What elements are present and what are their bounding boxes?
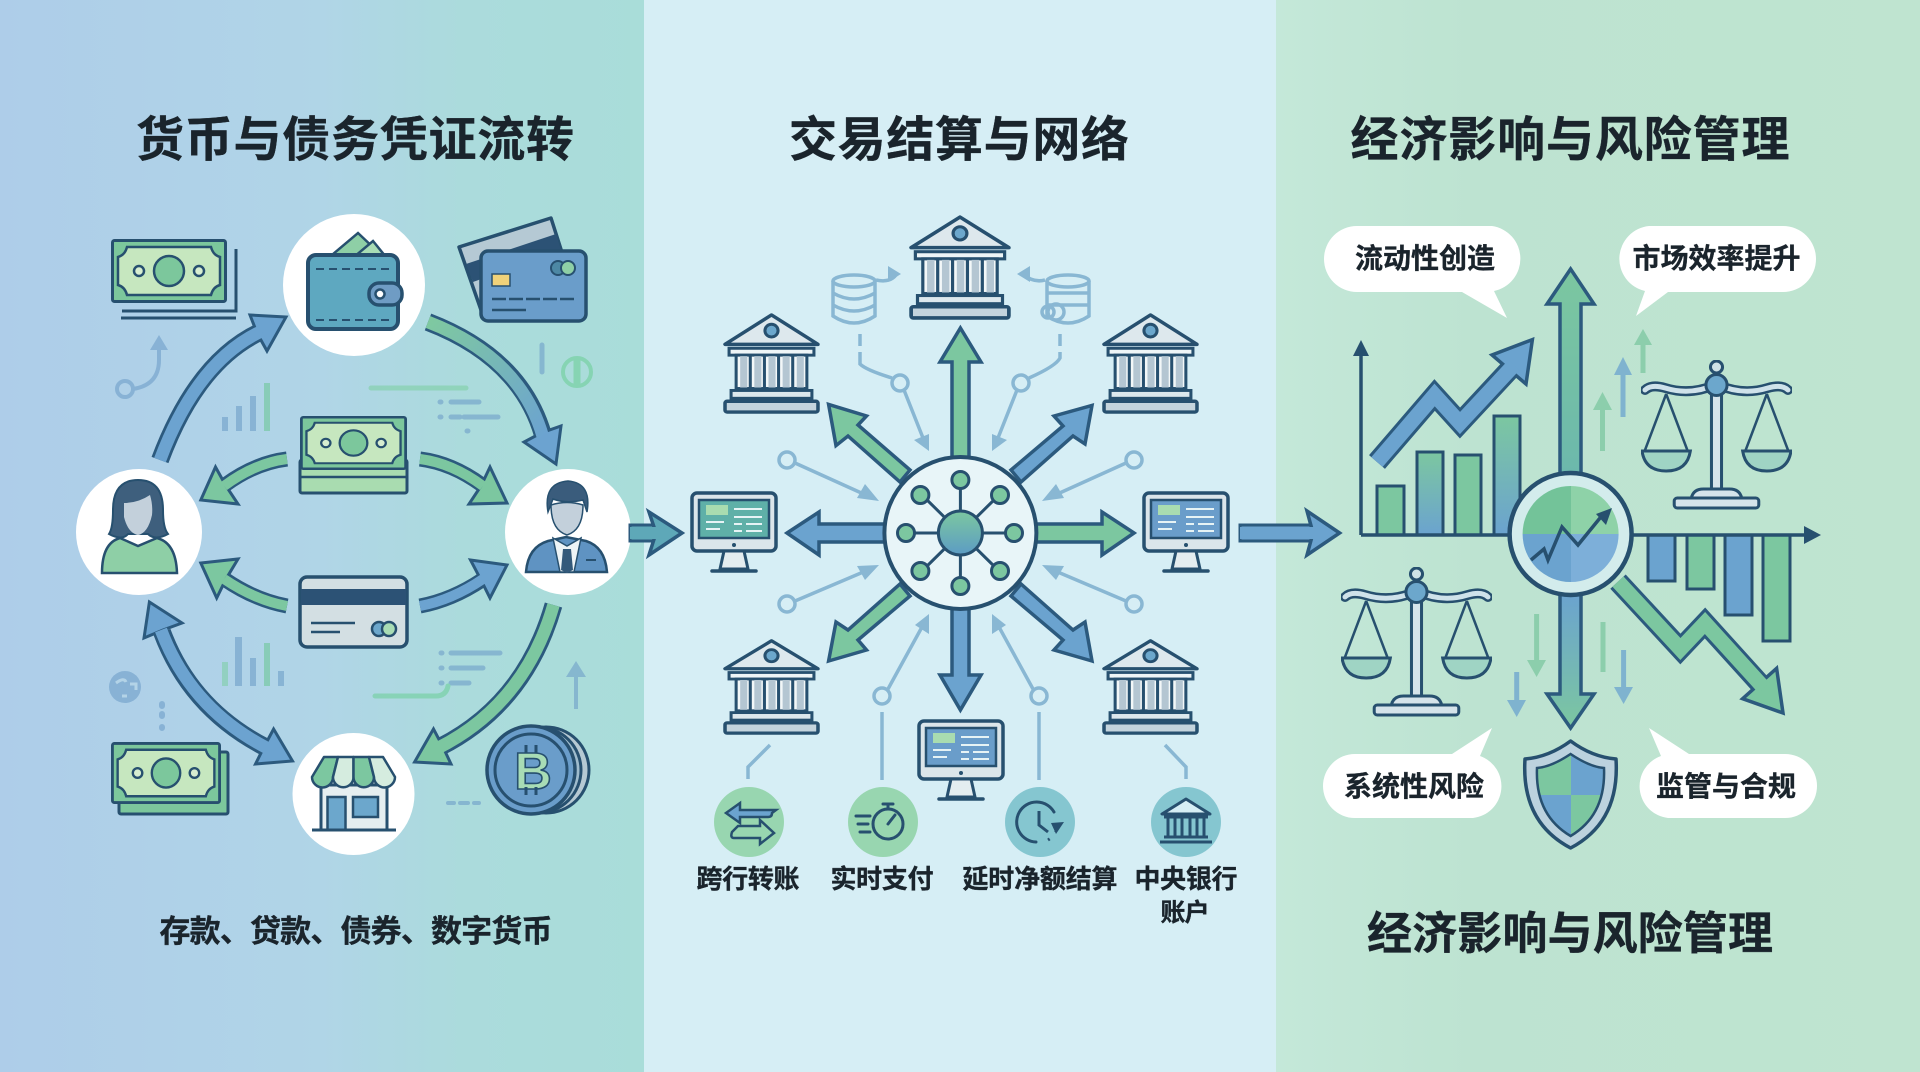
arrow: down-left [829,584,910,661]
outer circular flow arrows [144,315,561,764]
connector arrowheads [857,434,1064,634]
arrow: up-left [829,404,910,482]
chart: rising bars and axes [1353,340,1520,535]
callout: regulation and compliance: 监管与合规 [1656,771,1796,802]
icon: central bank top [911,217,1009,318]
node: male advisor [505,469,631,595]
icon: center bill stack [300,417,407,493]
arrow: advisor to shop [415,605,554,764]
network arrows from hub [787,328,1134,710]
faint green ring [563,358,591,386]
callout: liquidity creation [1324,226,1520,318]
icon: shield [1525,741,1616,848]
icon: deferred net settlement [1005,787,1075,857]
arrow: middle panel to right panel [1240,511,1340,555]
icon: bank cards [459,218,586,321]
icon: bank upper left [725,315,818,412]
label: interbank transfer: 跨行转账 [696,864,800,894]
label: central bank account: 账户 [1160,899,1210,927]
arrow: falling trend [1618,582,1783,713]
panel: economic impact background [1276,0,1920,1072]
label: real-time payment: 实时支付 [830,864,934,894]
node: female customer [76,469,202,595]
icon: cash stack top left [112,240,236,318]
label: central bank account [1134,864,1238,927]
arrow: left panel to middle panel [630,512,682,555]
arrow: down [940,606,981,710]
caption: right panel: 经济影响与风险管理 [1367,908,1773,959]
callout: market efficiency: 市场效率提升 [1632,243,1800,274]
arrow: customer to wallet [160,315,286,460]
chart: falling bars [1648,535,1790,641]
icon: terminal right [1144,493,1228,571]
faint down arrows [1507,614,1633,717]
arrow: left [787,512,888,555]
icon: bank lower left [725,641,818,733]
arrow: bill to advisor [420,459,507,504]
arrow: bill to customer [201,459,287,504]
arrow: up [940,328,981,460]
icon: bank lower right [1104,641,1197,733]
decorative faint marks: left panel [109,335,591,803]
faint arrow with node [117,335,168,397]
caption: left panel: 存款、贷款、债券、数字货币 [160,914,552,949]
panel: money and debt instruments background [0,0,644,1072]
arrow: card to customer [201,559,287,606]
icon: real-time payment [848,787,918,857]
arrow: wallet to advisor [428,322,561,464]
icon: central bank account [1151,787,1221,857]
icon: terminal bottom [919,721,1003,799]
arrow: big downward [1547,594,1594,728]
node: wallet [283,214,425,356]
faint databases [833,266,1089,323]
title: left panel: 货币与债务凭证流转 [136,114,574,167]
icon: center card [300,577,407,647]
arrow: right [1033,512,1134,555]
connector nodes [779,375,1142,704]
faint bar cluster top [222,383,270,431]
magnifier with chart [1510,473,1632,595]
icon: cash stack bottom left [112,743,228,814]
axis: horizontal [1361,526,1821,544]
callout: systemic risk: 系统性风险 [1344,771,1484,802]
faint lines bottom [375,653,500,696]
faint bar cluster bottom [222,637,284,686]
callout: systemic risk [1323,728,1501,818]
label: deferred net settlement: 延时净额结算 [962,864,1118,894]
icon: balance scale right [1642,361,1791,508]
faint globe [109,671,141,703]
title: right panel: 经济影响与风险管理 [1350,114,1790,167]
arrow: card to advisor [420,560,507,606]
callout: market efficiency [1619,226,1816,316]
callout: liquidity creation: 流动性创造 [1355,243,1495,274]
icon: balance scale left [1342,568,1491,715]
node: shop [292,733,414,855]
icon: bitcoin coins [487,726,589,814]
callout: regulation and compliance [1640,728,1817,818]
faint up arrows [1593,329,1652,451]
icon: bitcoin coins: B [514,743,552,801]
arrow: rising trend [1377,340,1532,462]
title: middle panel: 交易结算与网络 [789,114,1129,167]
icon: bank upper right [1104,315,1197,412]
arrow: big upward [1547,269,1594,476]
faint lines top [371,345,542,431]
label: central bank account: 中央银行 [1134,864,1238,894]
faint connector lines: middle panel [748,266,1186,780]
panel: settlement network background [644,0,1276,1072]
arrow: up-right [1011,405,1092,482]
arrow: shop and customer two-way [144,602,292,764]
arrow: down-right [1011,584,1092,661]
icon: interbank transfer [714,787,784,857]
faint dots and up arrow [162,661,586,803]
central network hub [884,457,1036,609]
icon: terminal left [692,493,776,571]
